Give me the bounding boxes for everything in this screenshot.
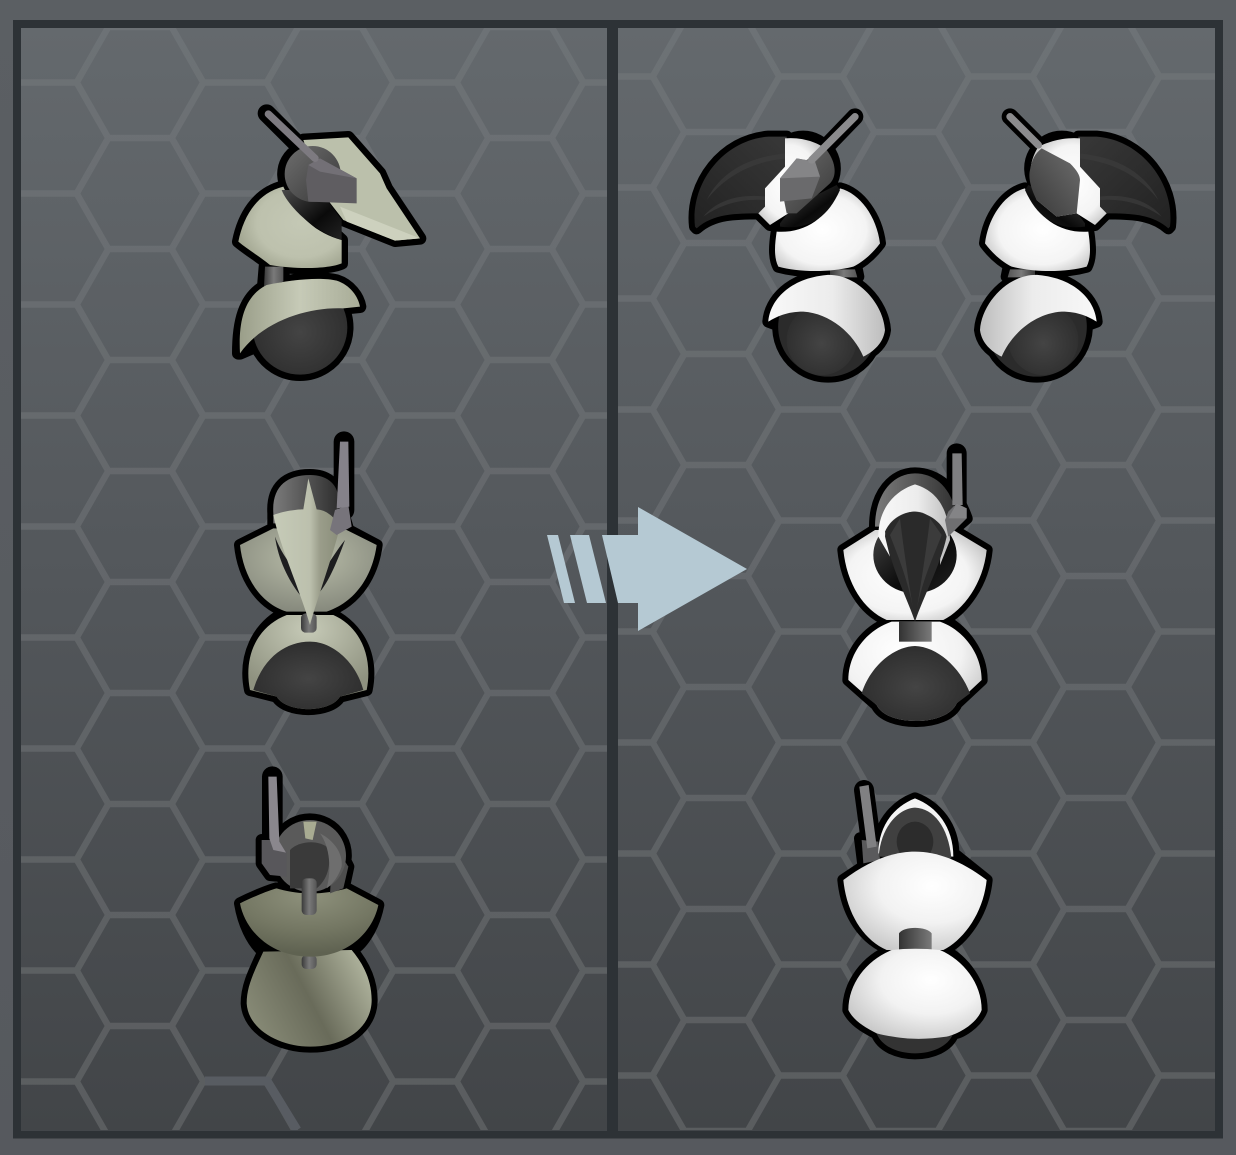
figure: white unit rear view bbox=[843, 785, 987, 1053]
figure: olive unit front view bbox=[240, 442, 377, 709]
panel: after templates bbox=[618, 28, 1215, 1130]
figure: olive unit rear view bbox=[240, 777, 378, 1047]
figure: white unit with wing facing left bbox=[695, 117, 885, 377]
figure: white unit front view bbox=[843, 453, 987, 721]
panel: before templates bbox=[21, 28, 607, 1130]
figure: white unit with wing facing right bbox=[980, 117, 1170, 377]
arrow: conversion direction bbox=[547, 507, 747, 631]
figure: olive unit with angled wing bbox=[238, 113, 420, 375]
